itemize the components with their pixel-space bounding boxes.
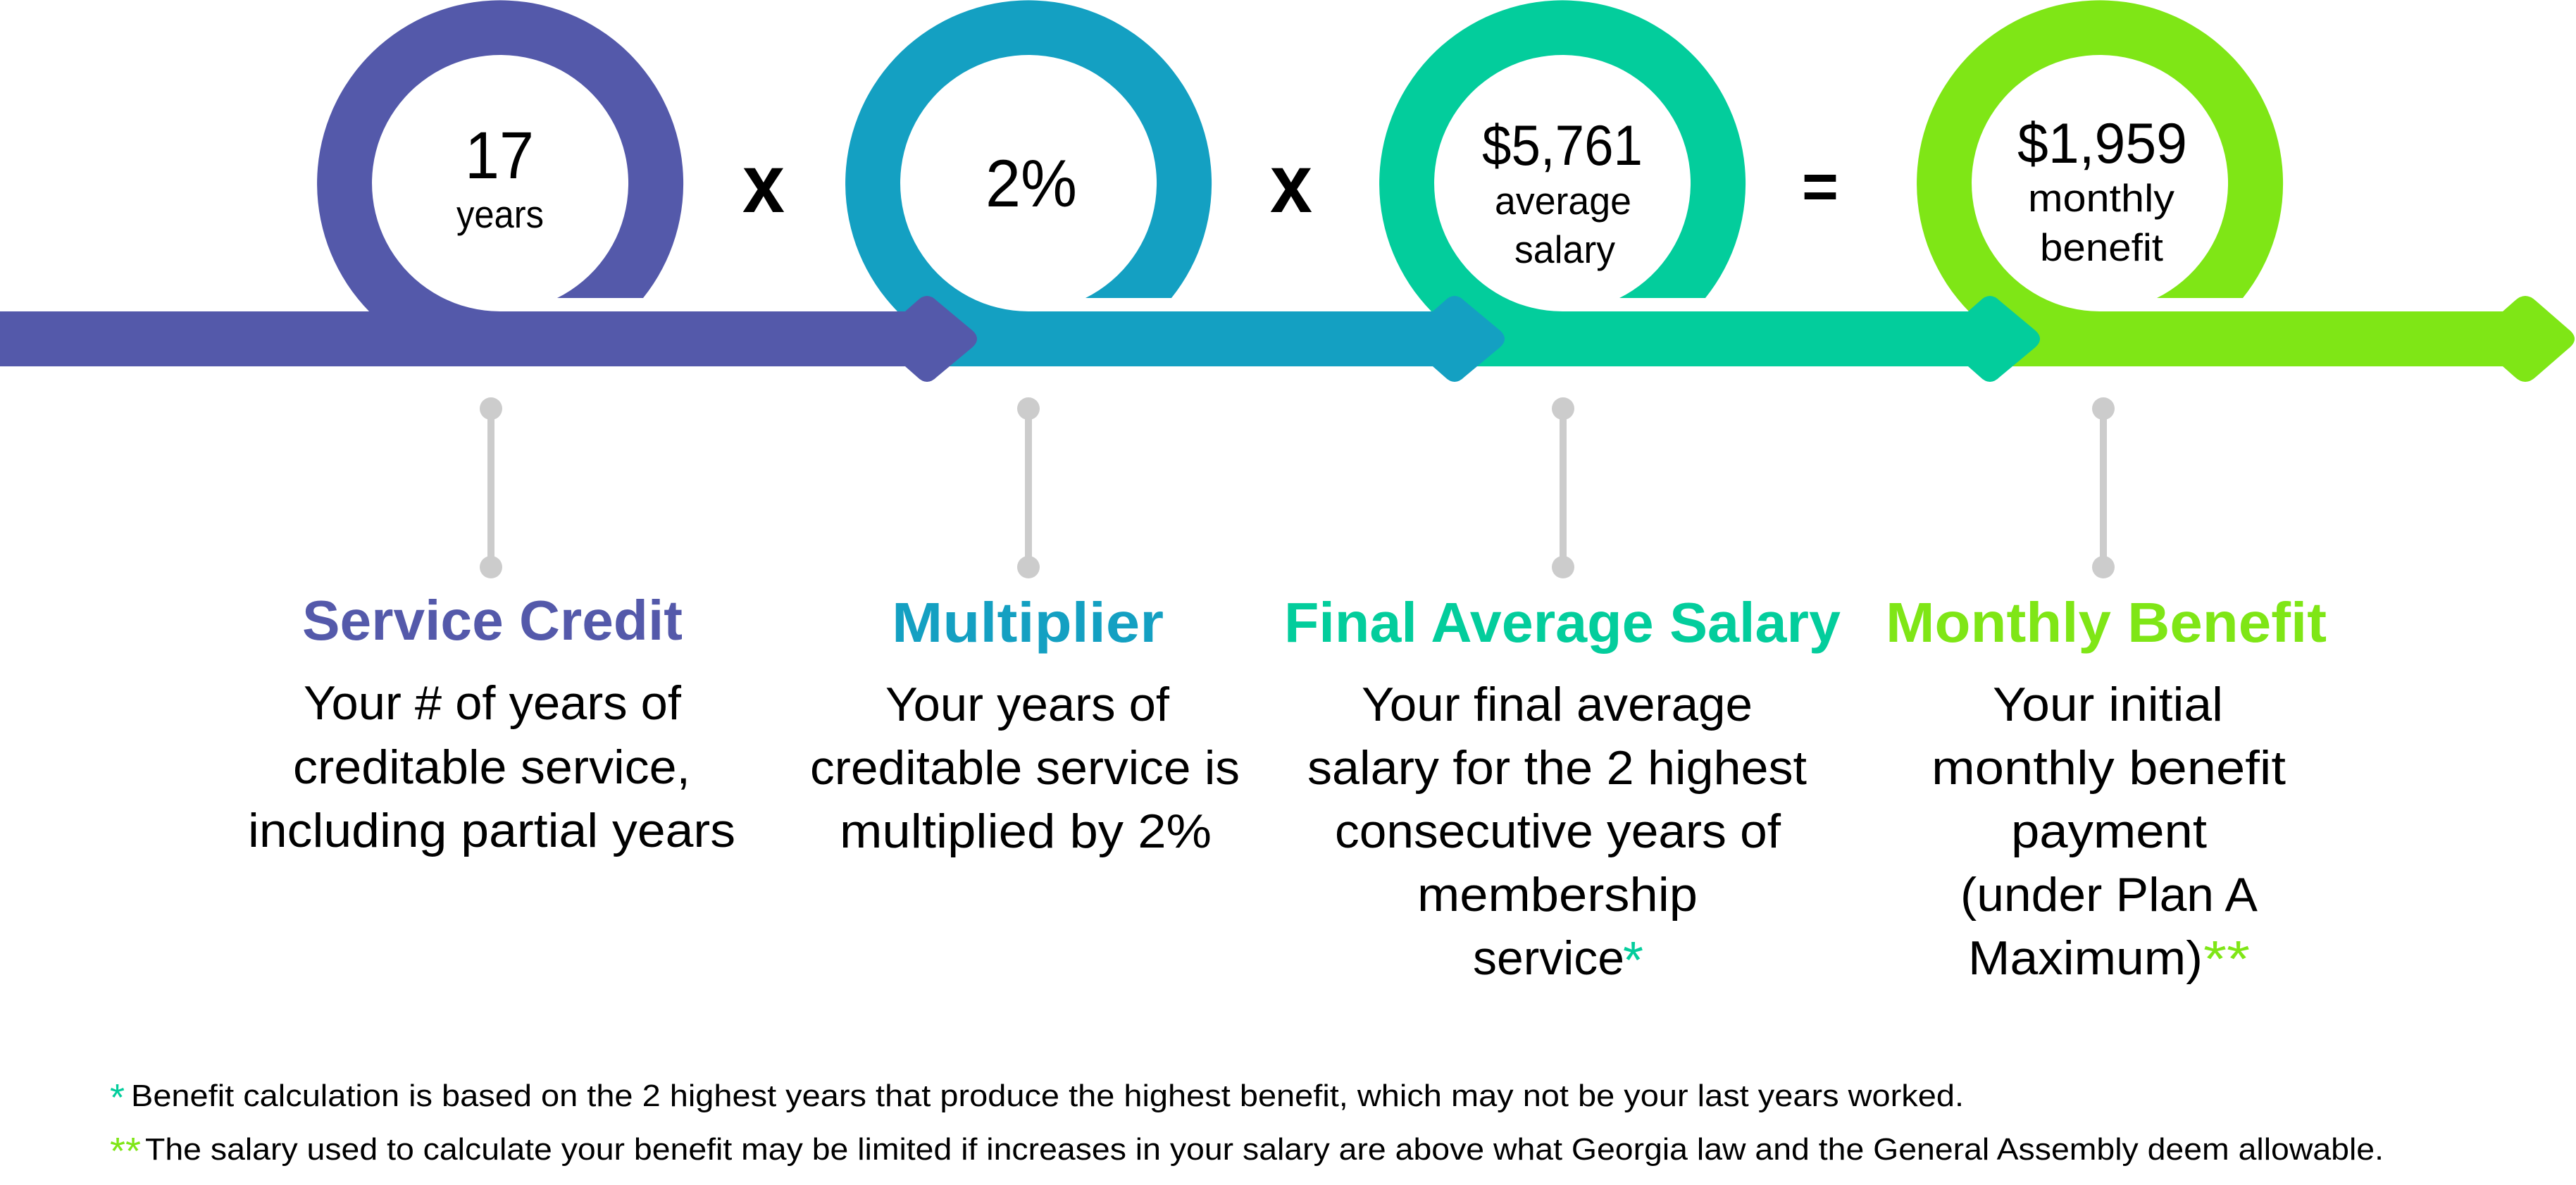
- value: $5,761 average salary: average: [1495, 179, 1631, 223]
- description: including partial years: [248, 804, 735, 857]
- description: consecutive years of: [1335, 805, 1781, 858]
- connector: [1552, 397, 1574, 578]
- panel: final average salary: [1284, 397, 1841, 989]
- description: Your initial: [1993, 678, 2223, 731]
- description: [1307, 678, 1807, 989]
- description: multiplied by 2%: [840, 805, 1212, 858]
- value: $1,959 monthly benefit: [2017, 112, 2187, 269]
- value: 17 years: years: [456, 192, 544, 236]
- description: [810, 678, 1240, 858]
- description: [248, 676, 735, 857]
- operator: equals: =: [1802, 151, 1838, 223]
- panel: service credit: [248, 397, 735, 857]
- arrow loop: monthly benefit (lime): [1902, 0, 2575, 382]
- description: payment: [2011, 805, 2207, 858]
- value: 17 years: 17: [465, 118, 534, 193]
- value: $5,761 average salary: salary: [1514, 228, 1615, 271]
- description: *: [1623, 931, 1643, 989]
- value: $1,959 monthly benefit: benefit: [2040, 225, 2163, 269]
- description: [1931, 678, 2286, 988]
- value: $5,761 average salary: $5,761: [1482, 114, 1643, 178]
- heading: Service Credit: [302, 589, 683, 652]
- description: salary for the 2 highest: [1307, 741, 1807, 795]
- arrow loop: final average salary (green): [1374, 0, 2040, 382]
- description: creditable service is: [810, 741, 1240, 795]
- arrow loop: multiplier (blue): [845, 0, 1505, 382]
- description: monthly benefit: [1931, 741, 2286, 795]
- description: Your # of years of: [304, 676, 681, 730]
- footnote: single asterisk: Benefit calculation is based on the 2 highest years that produce the highest benefit, which may not be your last years worked.: [131, 1079, 1964, 1113]
- description: (under Plan A: [1960, 868, 2258, 922]
- operator: times: x: [742, 137, 785, 230]
- heading: Multiplier: [892, 591, 1164, 654]
- operator: times: x: [1270, 137, 1312, 230]
- footnote: double asterisk: **: [110, 1130, 141, 1172]
- value: $1,959 monthly benefit: $1,959: [2017, 112, 2187, 175]
- description: Your years of: [885, 678, 1169, 731]
- footnote: double asterisk: The salary used to calculate your benefit may be limited if increases in your salary are above what Georgia law and the General Assembly deem allowable.: [145, 1132, 2384, 1167]
- description: membership: [1417, 868, 1698, 922]
- connector: [2092, 397, 2115, 578]
- value: $5,761 average salary: [1482, 114, 1643, 271]
- value: $1,959 monthly benefit: monthly: [2028, 176, 2175, 220]
- panel: monthly benefit: [1886, 397, 2327, 988]
- connector: [1017, 397, 1040, 578]
- arrow loop: service credit (purple): [0, 0, 977, 382]
- heading: Monthly Benefit: [1886, 591, 2327, 654]
- value: 17 years: [456, 118, 544, 236]
- footnote: single asterisk: *: [110, 1077, 125, 1119]
- value: 2%: 2%: [985, 147, 1077, 221]
- description: Maximum): [1968, 931, 2203, 985]
- description: service: [1473, 931, 1624, 985]
- connector: [480, 397, 502, 578]
- panel: multiplier: [810, 397, 1240, 858]
- description: Your final average: [1362, 678, 1753, 731]
- description: **: [2203, 931, 2250, 988]
- description: creditable service,: [293, 740, 690, 794]
- heading: Final Average Salary: [1284, 591, 1841, 654]
